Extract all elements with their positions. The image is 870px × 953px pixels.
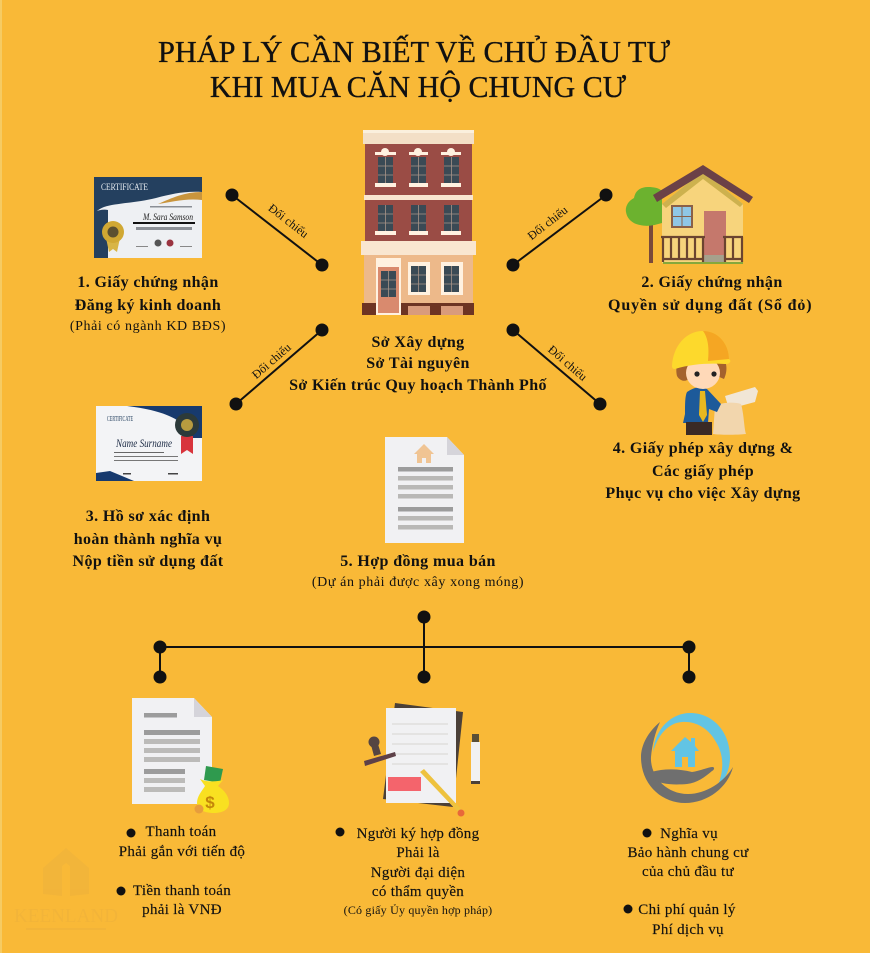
title — [158, 34, 670, 104]
connector labels: Đối chiếu — [525, 203, 570, 243]
connector labels: Đối chiếu — [545, 342, 590, 384]
icon: certificate 1: M. Sara Samson — [142, 212, 193, 222]
icon: certificate 1 — [94, 177, 202, 258]
central authorities text: Sở Tài nguyên — [366, 355, 470, 372]
text: item 5: 5. Hợp đồng mua bán — [340, 553, 496, 570]
text: item 2: 2. Giấy chứng nhận — [641, 274, 783, 291]
icon: signed contract with stamp and pen — [364, 703, 480, 816]
text: item 2 — [608, 274, 812, 314]
text: warranty notes — [624, 826, 749, 938]
text: item 3: 3. Hồ sơ xác định — [86, 508, 210, 525]
icon: hand holding house — [641, 713, 733, 803]
central authorities text — [289, 334, 548, 394]
icon: certificate 2 — [96, 406, 202, 481]
text: item 1: 1. Giấy chứng nhận — [77, 274, 219, 291]
icon: payment document with money bag — [132, 698, 229, 814]
icon: certificate 2: Name Surname — [115, 438, 172, 450]
icon: certificate 1: CERTIFICATE — [101, 183, 148, 193]
text: item 5 — [312, 553, 524, 590]
text: signatory notes — [336, 826, 492, 917]
text: item 2: Quyền sử dụng đất (Sổ đỏ) — [608, 297, 812, 314]
text: payment notes: Thanh toán — [146, 824, 217, 840]
connector labels — [249, 201, 590, 384]
text: warranty notes: Phí dịch vụ — [652, 922, 724, 938]
text: payment notes: Phải gắn với tiến độ — [119, 844, 245, 860]
icon: engineer with blueprint — [672, 331, 758, 435]
text: item 4: 4. Giấy phép xây dựng & — [613, 440, 793, 457]
text: warranty notes: của chủ đầu tư — [642, 864, 735, 880]
title: PHÁP LÝ CẦN BIẾT VỀ CHỦ ĐẦU TƯ — [158, 34, 670, 69]
text: item 4 — [605, 440, 801, 502]
icon: apartment building — [361, 130, 476, 315]
text: item 1 — [70, 274, 226, 334]
text: item 5: (Dự án phải được xây xong móng) — [312, 575, 524, 590]
text: item 3 — [73, 508, 224, 570]
central authorities text: Sở Xây dựng — [371, 334, 465, 351]
text: signatory notes: có thẩm quyền — [372, 884, 464, 900]
text: signatory notes: Người ký hợp đồng — [357, 826, 480, 842]
text: warranty notes: Bảo hành chung cư — [627, 845, 749, 861]
text: payment notes: phải là VNĐ — [142, 902, 222, 918]
text: payment notes: Tiền thanh toán — [133, 883, 231, 899]
icon: certificate 2: CERTIFICATE — [107, 414, 133, 423]
central authorities text: Sở Kiến trúc Quy hoạch Thành Phố — [289, 377, 548, 394]
text: payment notes — [116, 824, 245, 918]
connector lines: building to documents — [226, 190, 612, 410]
title: KHI MUA CĂN HỘ CHUNG CƯ — [210, 69, 626, 104]
text: item 4: Phục vụ cho việc Xây dựng — [605, 485, 801, 502]
text: item 3: hoàn thành nghĩa vụ — [74, 531, 222, 548]
connector labels: Đối chiếu — [249, 340, 294, 382]
text: warranty notes: Nghĩa vụ — [660, 826, 718, 842]
icon: house with tree — [626, 165, 753, 264]
text: signatory notes: Người đại diện — [371, 865, 465, 881]
watermark logo: KEENLAND — [14, 905, 118, 927]
text: warranty notes: Chi phí quản lý — [638, 902, 736, 918]
text: signatory notes: (Có giấy Ủy quyền hợp pháp) — [344, 903, 492, 917]
text: item 1: (Phải có ngành KD BĐS) — [70, 319, 226, 334]
text: signatory notes: Phải là — [396, 845, 440, 861]
connector labels: Đối chiếu — [266, 201, 311, 241]
icon: payment document with money bag: $ — [205, 793, 215, 812]
tree connector — [154, 612, 694, 682]
text: item 4: Các giấy phép — [652, 463, 754, 480]
text: item 1: Đăng ký kinh doanh — [75, 297, 221, 314]
icon: contract document with house — [385, 437, 464, 543]
text: item 3: Nộp tiền sử dụng đất — [73, 553, 224, 570]
watermark logo — [14, 848, 118, 930]
